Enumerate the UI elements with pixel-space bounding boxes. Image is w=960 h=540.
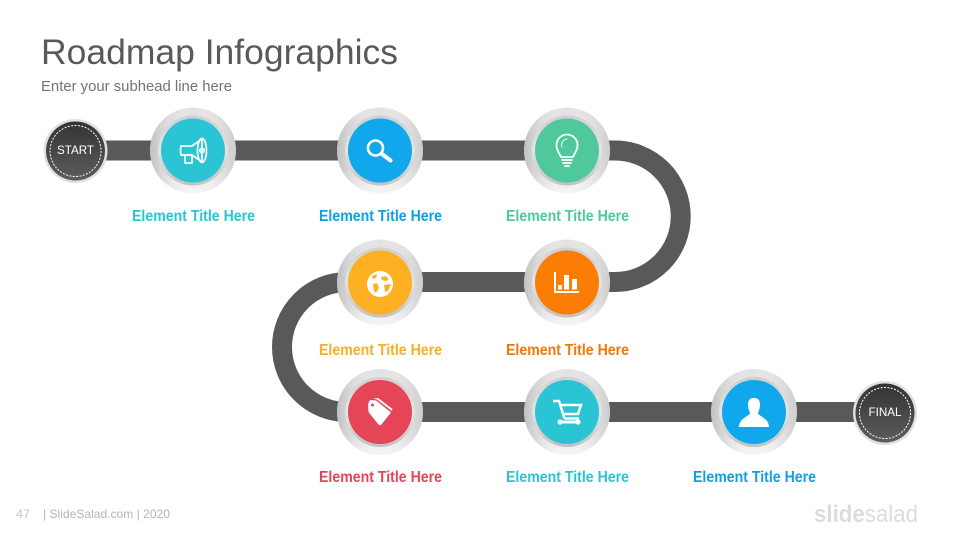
label: Element Title Here bbox=[693, 469, 816, 486]
final label: FINAL bbox=[868, 405, 902, 419]
label: Element Title Here bbox=[319, 342, 442, 359]
step 4: chart bbox=[506, 240, 629, 359]
label: Element Title Here bbox=[506, 342, 629, 359]
icon: megaphone bbox=[180, 138, 206, 163]
roadmap track bbox=[80, 150, 880, 412]
final marker bbox=[853, 381, 917, 445]
label: Element Title Here bbox=[319, 469, 442, 486]
step 1: megaphone bbox=[132, 108, 255, 225]
subtitle: Enter your subhead line here bbox=[41, 78, 232, 95]
label: Element Title Here bbox=[319, 208, 442, 225]
label: Element Title Here bbox=[506, 208, 629, 225]
page number: 47 bbox=[16, 507, 30, 521]
icon: globe bbox=[367, 271, 393, 297]
step 6: tag bbox=[319, 369, 442, 486]
step 8: person bbox=[693, 369, 816, 486]
label: Element Title Here bbox=[506, 469, 629, 486]
icon: magnifier bbox=[368, 140, 390, 160]
icon: person bbox=[739, 398, 769, 427]
icon: price tag bbox=[368, 398, 392, 425]
icon: shopping cart bbox=[553, 401, 581, 425]
step 3: idea bbox=[506, 108, 629, 225]
icon: light bulb bbox=[556, 134, 578, 166]
icon: bar chart bbox=[554, 272, 579, 293]
step 5: globe bbox=[319, 240, 442, 359]
step 7: cart bbox=[506, 369, 629, 486]
footer text: | SlideSalad.com | 2020 bbox=[43, 507, 170, 521]
title: Roadmap Infographics bbox=[41, 33, 398, 72]
label: Element Title Here bbox=[132, 208, 255, 225]
step 2: search bbox=[319, 108, 442, 225]
logo wordmark: slidesalad bbox=[814, 501, 918, 528]
start label: START bbox=[57, 143, 95, 157]
start marker bbox=[44, 119, 108, 183]
